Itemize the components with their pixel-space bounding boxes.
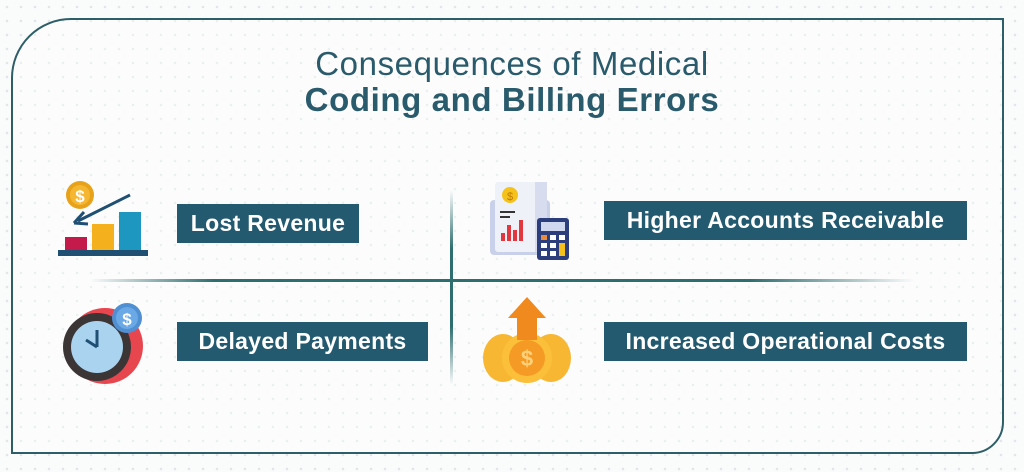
label: lost revenue: Lost Revenue xyxy=(191,210,345,236)
label: lost revenue xyxy=(177,204,359,243)
label: increased operational costs xyxy=(604,322,967,361)
vertical divider xyxy=(450,190,453,385)
label: higher accounts receivable: Higher Accounts Receivable xyxy=(627,207,944,233)
label: delayed payments xyxy=(177,322,428,361)
label: delayed payments: Delayed Payments xyxy=(198,328,407,354)
horizontal divider xyxy=(90,279,915,282)
label: higher accounts receivable xyxy=(604,201,967,240)
icon: accounts receivable xyxy=(490,182,569,260)
icon: lost revenue: $ xyxy=(75,187,85,206)
icon: delayed payments: $ xyxy=(122,310,132,329)
icon: accounts receivable: $ xyxy=(507,191,513,203)
icon: lost revenue xyxy=(58,181,148,256)
title: Consequences of Medical xyxy=(315,45,709,82)
icon: increased costs xyxy=(483,297,571,383)
label: increased operational costs: Increased Operational Costs xyxy=(626,328,945,354)
icon: increased costs: $ xyxy=(521,346,533,371)
title: Coding and Billing Errors xyxy=(305,81,719,118)
icon: delayed payments xyxy=(63,303,143,384)
title xyxy=(305,45,719,118)
